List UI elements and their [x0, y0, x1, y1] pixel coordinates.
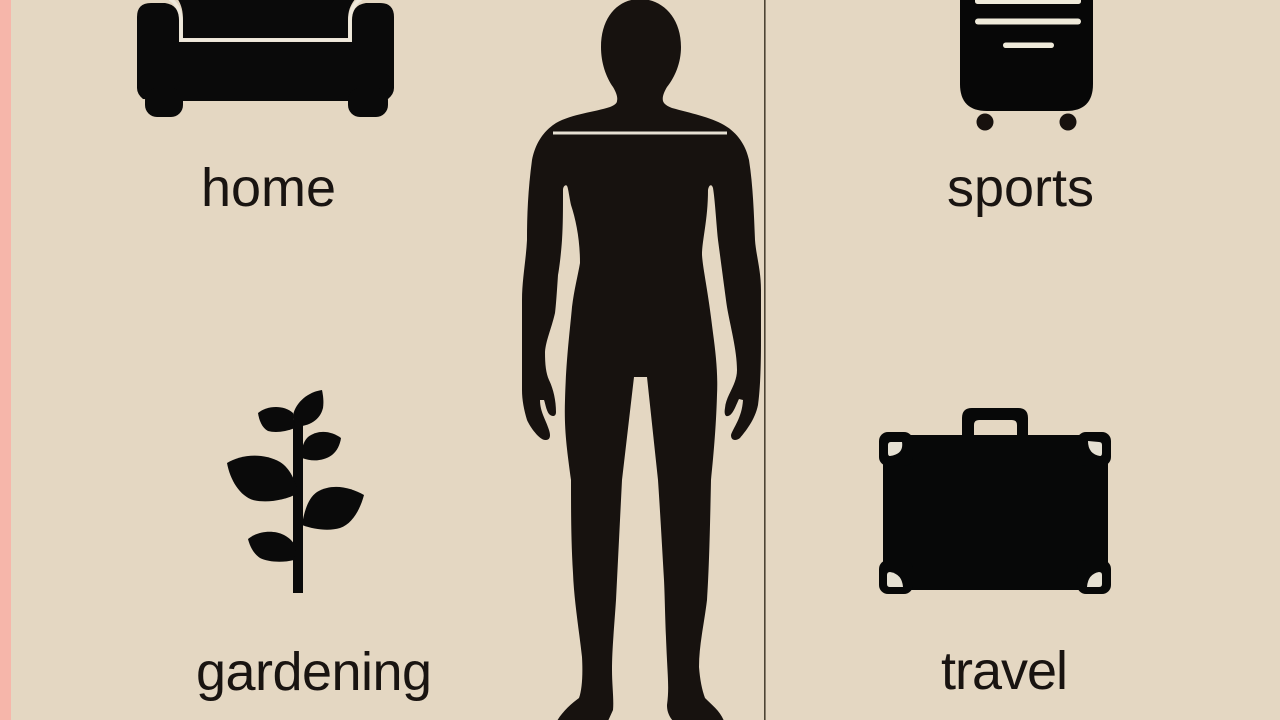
icon: person silhouette [522, 0, 761, 720]
label: travel: travel [941, 641, 1068, 701]
vertical divider [764, 0, 766, 720]
label: gardening: gardening [196, 642, 432, 702]
icon: sofa (home) [137, 0, 394, 117]
icon: rolling luggage (sports) [960, 0, 1093, 130]
label: sports: sports [947, 158, 1094, 218]
pink accent stripe [0, 0, 11, 720]
icon: suitcase (travel) [879, 408, 1111, 594]
icon: plant (gardening) [227, 390, 364, 593]
label: home: home [201, 158, 336, 218]
